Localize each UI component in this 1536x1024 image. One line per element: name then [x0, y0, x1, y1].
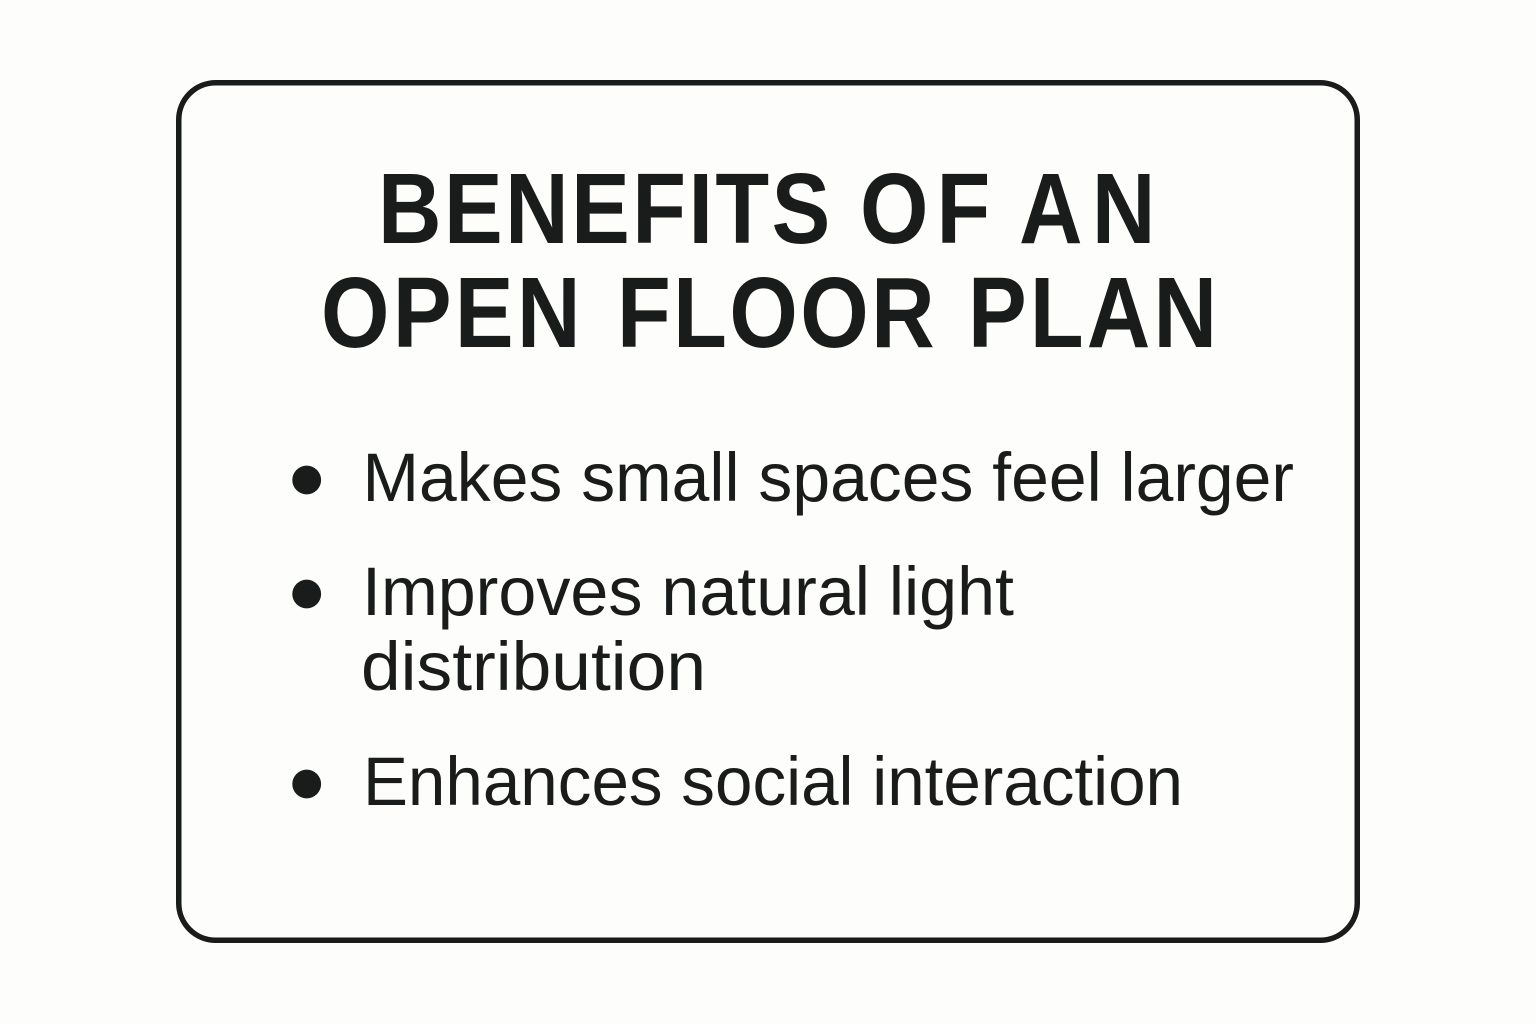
title: AN — [1019, 153, 1155, 264]
title: OF — [860, 153, 990, 264]
bullet 2 text: Improves natural light — [362, 553, 1014, 630]
title: OPEN — [321, 257, 581, 368]
title: PLAN — [968, 257, 1217, 368]
title: BENEFITS — [378, 153, 830, 264]
bullet 3 text: Enhances social interaction — [363, 743, 1183, 820]
title — [321, 153, 1217, 368]
bullet 1 icon — [292, 466, 321, 494]
bullet 1 text: Makes small spaces feel larger — [362, 439, 1294, 516]
bullet 2 text — [361, 553, 1014, 705]
bullet 2 icon — [292, 580, 321, 608]
panel: benefits card — [179, 83, 1357, 940]
bullet list — [292, 439, 1294, 820]
title: FLOOR — [617, 257, 935, 368]
bullet 3 icon — [292, 770, 321, 798]
bullet 2 text: distribution — [361, 628, 706, 705]
